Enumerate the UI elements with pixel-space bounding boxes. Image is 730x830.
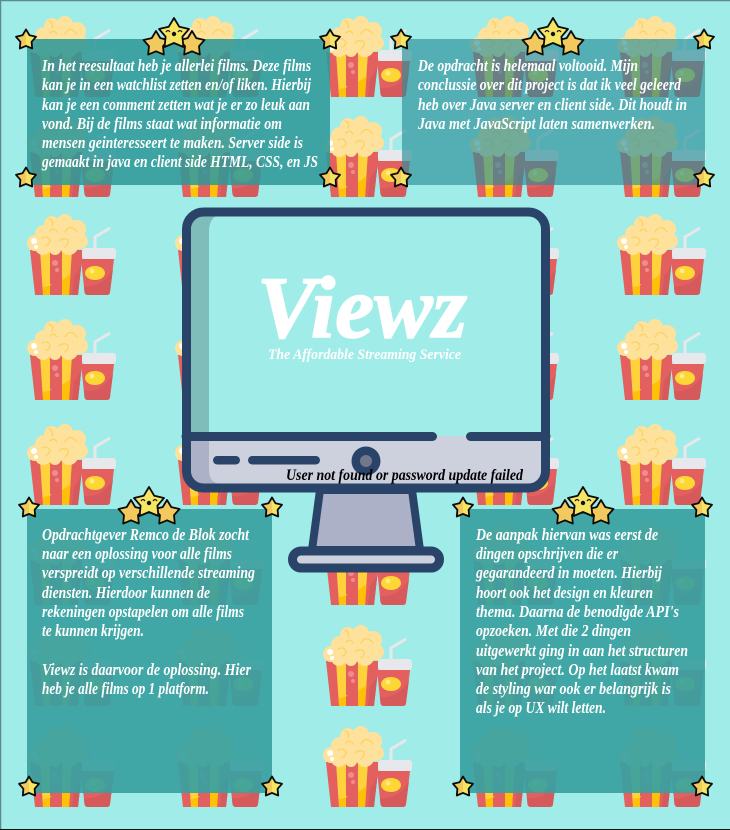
text: approach: uitgewerkt ging in aan het structuren (476, 641, 688, 660)
panel: approach (460, 509, 705, 793)
text: conclusion: De opdracht is helemaal voltooid. Mijn (417, 56, 638, 75)
text: client problem: Opdrachtgever Remco de Blok zocht (42, 525, 249, 544)
text: result: kan je in een watchlist zetten en/of liken. Hierbij (42, 75, 311, 94)
icon: monitor (186, 212, 546, 568)
panel: conclusion (402, 39, 705, 185)
text: approach: hoort ook het design en kleuren (476, 583, 653, 602)
text: client problem: heb je alle films op 1 platform. (42, 679, 209, 698)
status message: User not found or password update failed (286, 467, 523, 484)
text: approach (475, 525, 688, 717)
text: approach: als je op UX wilt letten. (476, 698, 606, 717)
text: client problem: verspreidt op verschillende streaming (42, 563, 255, 582)
text: conclusion: conclussie over dit project is dat ik veel geleerd (418, 75, 682, 94)
text: result (41, 56, 318, 171)
text: approach: gegarandeerd in moeten. Hierbij (475, 563, 662, 582)
text: client problem: naar een oplossing voor alle films (42, 544, 232, 563)
text: approach: opzoeken. Met die 2 dingen (476, 621, 631, 640)
text: approach: dingen opschrijven die er (476, 544, 618, 563)
text: approach: van het project. Op het laatst kwam (476, 660, 679, 679)
panel: result (27, 39, 330, 185)
text: approach: de styling war ook er belangrijk is (476, 679, 671, 698)
text: client problem: rekeningen opstapelen om alle films (42, 602, 244, 621)
text: result: mensen geinteresseert te maken. Server side is (42, 133, 303, 152)
text: conclusion: Java met JavaScript laten samenwerken. (417, 114, 655, 133)
subtitle: tagline: The Affordable Streaming Service (268, 347, 461, 363)
text: conclusion (417, 56, 687, 133)
panel: client problem (27, 509, 272, 793)
text: client problem: Viewz is daarvoor de oplossing. Hier (42, 660, 251, 679)
text: result: In het reesultaat heb je allerlei films. Deze films (41, 56, 311, 75)
text: approach: De aanpak hiervan was eerst de (475, 525, 658, 544)
title: Viewz logo: Viewz (257, 260, 467, 357)
text: client problem: diensten. Hierdoor kunnen de (42, 583, 210, 602)
icon: triple star badges (118, 18, 614, 524)
text: client problem (42, 525, 255, 698)
text: client problem: te kunnen krijgen. (42, 621, 144, 640)
text: result: kan je een comment zetten wat je er zo leuk aan (42, 95, 310, 114)
text: approach: thema. Daarna de benodigde API's (476, 602, 679, 621)
text: result: gemaakt in java en client side HTML, CSS, en JS (41, 152, 318, 171)
text: result: vond. Bij de films staat wat informatie om (42, 114, 282, 133)
